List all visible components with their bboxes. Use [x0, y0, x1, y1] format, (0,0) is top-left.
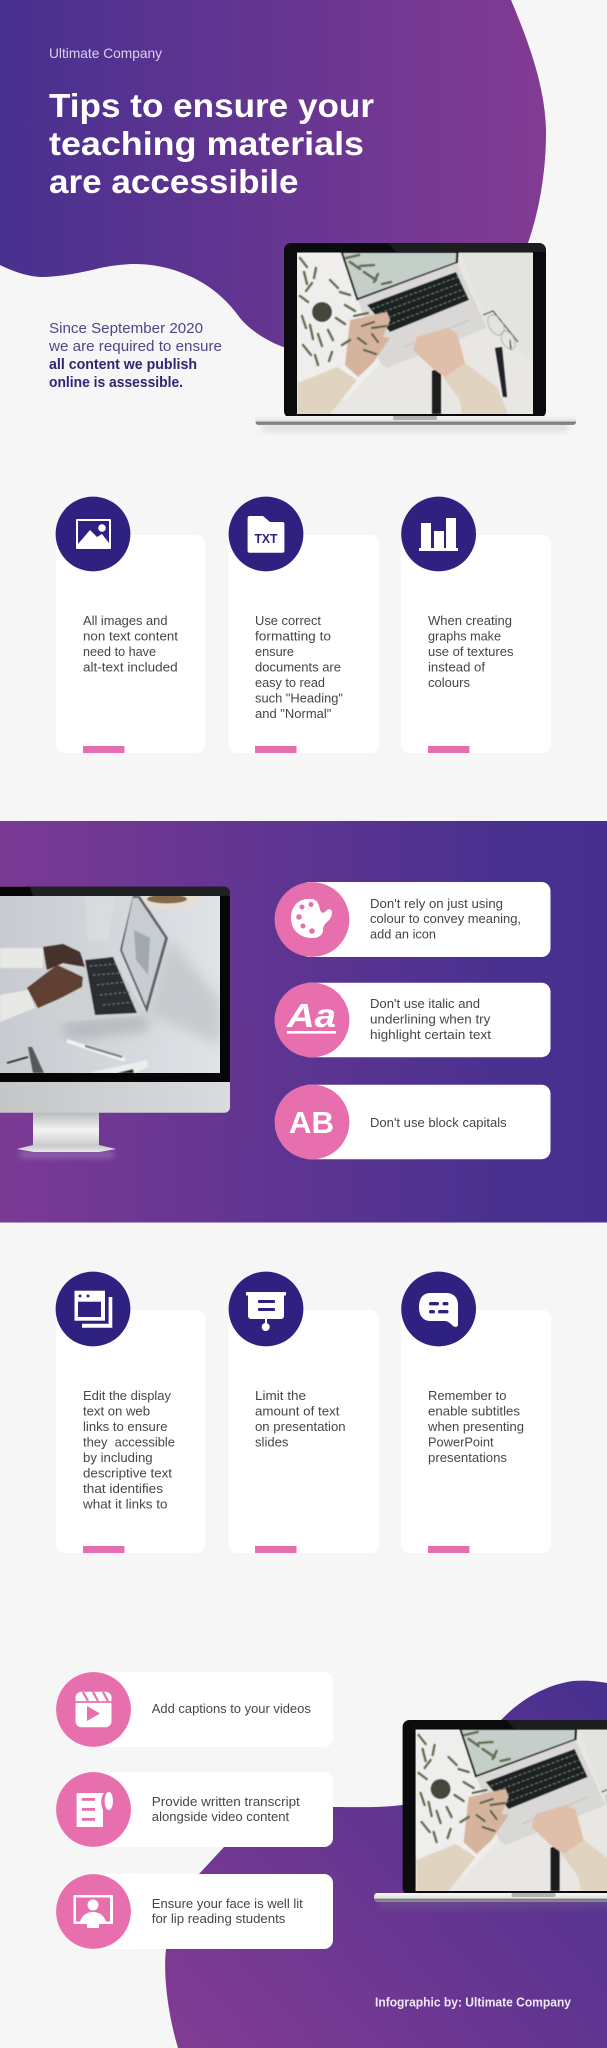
card text: and "Normal": [255, 706, 332, 721]
icon: Aa: [275, 983, 349, 1057]
card text: slides: [255, 1434, 289, 1450]
tip: captions: [56, 1672, 333, 1747]
card text: [428, 613, 514, 690]
card text: PowerPoint: [428, 1434, 494, 1450]
icon: presentation board: [229, 1272, 303, 1346]
icon: AB: [275, 1085, 349, 1159]
title: teaching materials: [49, 125, 364, 162]
tip text: [370, 996, 491, 1042]
card text: such "Heading": [255, 690, 343, 706]
card text: When creating: [428, 613, 512, 628]
card: display links: [56, 1272, 206, 1553]
tip text: Don't rely on just using: [370, 896, 503, 911]
tip text: Provide written transcript: [152, 1794, 300, 1809]
laptop with desk photo: [256, 243, 576, 431]
icon: windows: [56, 1272, 130, 1346]
tip text: underlining when try: [370, 1012, 491, 1027]
icon: person on screen: [56, 1874, 131, 1949]
tip text: Don't use italic and: [370, 996, 480, 1011]
icon: TXT file: TXT: [254, 531, 278, 546]
card text: that identifies: [83, 1481, 164, 1496]
tip text: [152, 1794, 300, 1824]
tip: italic and underline: [275, 983, 550, 1057]
card text: [255, 1388, 346, 1450]
icon: palette: [275, 882, 349, 957]
card text: they accessible: [83, 1434, 175, 1450]
tip text: Don't use block capitals: [370, 1115, 507, 1130]
tip text: [152, 1896, 303, 1926]
card text: what it links to: [82, 1496, 168, 1512]
tip: block capitals: [275, 1085, 550, 1159]
tip: colour and icon: [275, 882, 550, 957]
card text: descriptive text: [83, 1466, 172, 1480]
header blob: [0, 0, 546, 347]
icon: image: [56, 497, 130, 571]
card text: graphs make: [428, 628, 501, 644]
card text: use of textures: [428, 644, 514, 659]
card text: need to have: [83, 644, 156, 659]
card text: when presenting: [427, 1419, 524, 1434]
intro text: Since September 2020: [49, 320, 203, 337]
icon: TXT file: [229, 497, 303, 571]
footer credit: Infographic by: Ultimate Company: [375, 1995, 572, 2010]
card text: formatting to: [255, 628, 331, 644]
tip: transcript: [56, 1772, 333, 1847]
card: alt-text: [56, 497, 206, 753]
title: [49, 87, 374, 200]
purple band: [0, 821, 607, 1222]
tip text: Add captions to your videos: [152, 1701, 311, 1716]
card text: text on web: [83, 1404, 150, 1418]
card text: instead of: [428, 660, 485, 674]
card text: [427, 1388, 524, 1465]
card text: Use correct: [255, 613, 321, 628]
intro text: all content we publish: [49, 356, 197, 373]
tip text: highlight certain text: [370, 1027, 491, 1042]
icon: speech bubble: [401, 1272, 476, 1346]
tip text: Ensure your face is well lit: [152, 1896, 303, 1911]
icon: Aa: Aa: [286, 997, 336, 1034]
card text: Limit the: [255, 1388, 306, 1403]
card text: amount of text: [255, 1404, 340, 1418]
tip text: colour to convey meaning,: [370, 911, 521, 926]
title: are accessibile: [49, 163, 298, 200]
title: Tips to ensure your: [49, 87, 374, 124]
tip text: alongside video content: [152, 1809, 290, 1824]
card text: colours: [428, 675, 470, 690]
card text: [82, 1388, 175, 1512]
card text: presentations: [428, 1450, 507, 1465]
desktop monitor with photo: [0, 887, 230, 1157]
card text: easy to read: [255, 675, 325, 690]
card: formatting: [229, 497, 379, 753]
tip text: for lip reading students: [152, 1911, 286, 1926]
card text: links to ensure: [83, 1419, 168, 1434]
icon: AB: AB: [289, 1105, 334, 1140]
card text: non text content: [83, 628, 178, 644]
card: presentation slides: [229, 1272, 379, 1553]
company name: Ultimate Company: [49, 45, 162, 61]
icon: transcript scroll: [56, 1772, 131, 1847]
laptop with desk photo, footer: [374, 1720, 607, 1908]
intro text: we are required to ensure: [48, 338, 222, 355]
card: graphs: [401, 497, 551, 753]
card text: [83, 613, 178, 674]
card text: Remember to: [428, 1388, 506, 1403]
tip text: add an icon: [370, 927, 436, 942]
card text: by including: [83, 1450, 153, 1465]
card text: alt-text included: [83, 660, 178, 674]
card text: [255, 613, 343, 721]
card text: documents are: [255, 660, 341, 674]
card: subtitles: [401, 1272, 551, 1553]
card text: ensure: [255, 644, 294, 659]
card text: Edit the display: [83, 1388, 171, 1403]
tip text: [370, 896, 521, 942]
card text: enable subtitles: [428, 1404, 521, 1418]
card text: on presentation: [255, 1419, 346, 1434]
tip: lighting: [56, 1874, 333, 1949]
icon: bar chart: [401, 497, 476, 571]
footer blob: [165, 1681, 607, 2048]
card text: All images and: [83, 613, 168, 628]
intro text: online is assessible.: [49, 374, 183, 391]
intro text: [48, 320, 222, 391]
icon: video clapper: [56, 1672, 131, 1747]
